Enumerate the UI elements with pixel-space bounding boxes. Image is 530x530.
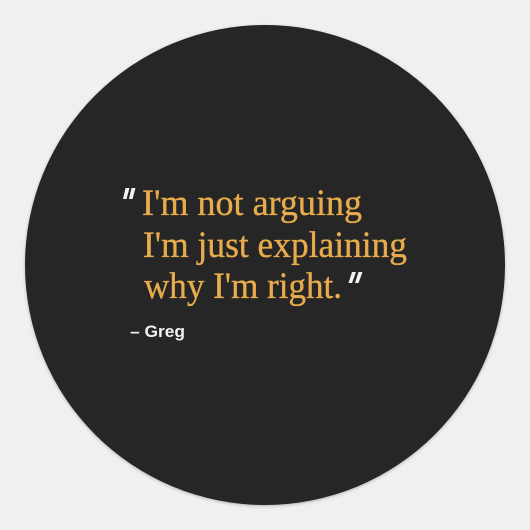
icon: closing quotation mark bbox=[348, 272, 362, 283]
quote text bbox=[142, 183, 407, 307]
quote text: I'm just explaining bbox=[143, 225, 407, 266]
quote text: I'm not arguing bbox=[142, 183, 362, 224]
attribution: – Greg bbox=[130, 323, 185, 341]
quote text: why I'm right. bbox=[144, 266, 342, 307]
icon: opening quotation mark bbox=[123, 188, 136, 199]
